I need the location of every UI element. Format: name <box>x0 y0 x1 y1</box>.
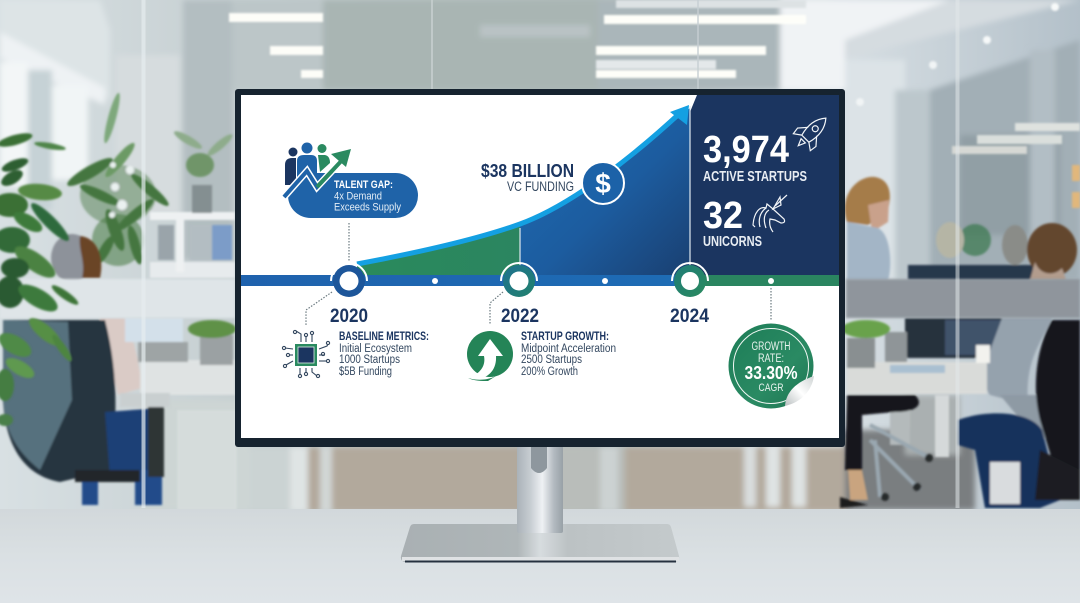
icon: unicorn <box>753 195 787 232</box>
chair and legs right <box>845 395 919 470</box>
timeline node 2022 <box>501 263 537 297</box>
badge: growth rate sticker <box>728 324 818 412</box>
ceiling lights <box>229 13 323 22</box>
callout: talent gap <box>284 142 418 218</box>
screen: infographic <box>241 95 839 438</box>
label: VC funding: $38 BILLION <box>481 161 574 181</box>
text: startup growth <box>521 331 616 378</box>
badge: growth rate sticker: CAGR <box>758 382 784 394</box>
frosted band left and right <box>0 279 235 318</box>
desk surface <box>0 509 1080 603</box>
icon: up arrow circle <box>467 331 513 381</box>
stat: unicorns: 32 <box>703 195 743 237</box>
callout text <box>334 179 401 214</box>
stat: active startups: ACTIVE STARTUPS <box>703 169 807 185</box>
left desk <box>125 318 183 342</box>
icon: dollar circle <box>582 162 624 204</box>
icon: people with rising arrow <box>284 142 351 197</box>
foreground leaves <box>0 131 80 426</box>
year 2024: 2024 <box>670 306 709 327</box>
man right <box>1027 223 1077 277</box>
chart: green area 2020-2022 <box>357 224 520 276</box>
text: baseline metrics: $5B Funding <box>339 366 392 378</box>
stat: unicorns: UNICORNS <box>703 234 762 250</box>
monitor stand <box>401 446 679 562</box>
timeline node 2024 <box>672 263 708 297</box>
panel: navy stats <box>690 95 839 276</box>
callout text: TALENT GAP: <box>334 179 393 191</box>
timeline node 2020 <box>331 263 367 297</box>
text: baseline metrics: Initial Ecosystem <box>339 343 412 355</box>
text: baseline metrics <box>339 331 429 378</box>
text: baseline metrics: 1000 Startups <box>339 354 400 366</box>
sticker page curl <box>785 376 814 406</box>
icon: rocket <box>789 109 835 155</box>
label: VC funding <box>481 161 574 194</box>
year 2022: 2022 <box>501 306 539 327</box>
text: startup growth: 200% Growth <box>521 366 578 378</box>
right desk <box>847 362 987 394</box>
plant background left <box>64 92 235 266</box>
stat: unicorns <box>703 195 762 250</box>
icon: dollar circle: $ <box>595 168 611 199</box>
woman left <box>51 234 93 282</box>
badge: growth rate sticker: 33.30% <box>744 363 798 383</box>
vertical markers <box>520 106 690 268</box>
shelf left <box>150 212 235 220</box>
monitor bezel <box>235 89 845 447</box>
right people <box>845 177 890 225</box>
stat: active startups <box>703 129 807 185</box>
year 2020: 2020 <box>330 306 368 327</box>
stat: active startups: 3,974 <box>703 129 789 171</box>
growth curve arrow <box>357 105 689 264</box>
badge: growth rate sticker: GROWTH <box>752 341 790 353</box>
floor under monitor <box>230 447 850 512</box>
callout text: Exceeds Supply <box>334 202 401 214</box>
text: startup growth: 2500 Startups <box>521 354 582 366</box>
timeline bar <box>241 275 839 286</box>
text: baseline metrics: BASELINE METRICS: <box>339 331 429 343</box>
text: startup growth: Midpoint Acceleration <box>521 343 616 355</box>
dotted connectors <box>306 223 771 325</box>
callout text: 4x Demand <box>334 190 382 202</box>
chart: blue area 2022-2024 <box>520 108 690 276</box>
text: startup growth: STARTUP GROWTH: <box>521 331 609 343</box>
badge: growth rate sticker: RATE: <box>758 353 784 365</box>
glass edges <box>142 0 146 508</box>
label: VC funding: VC FUNDING <box>507 179 574 194</box>
icon: circuit chip <box>282 330 330 378</box>
